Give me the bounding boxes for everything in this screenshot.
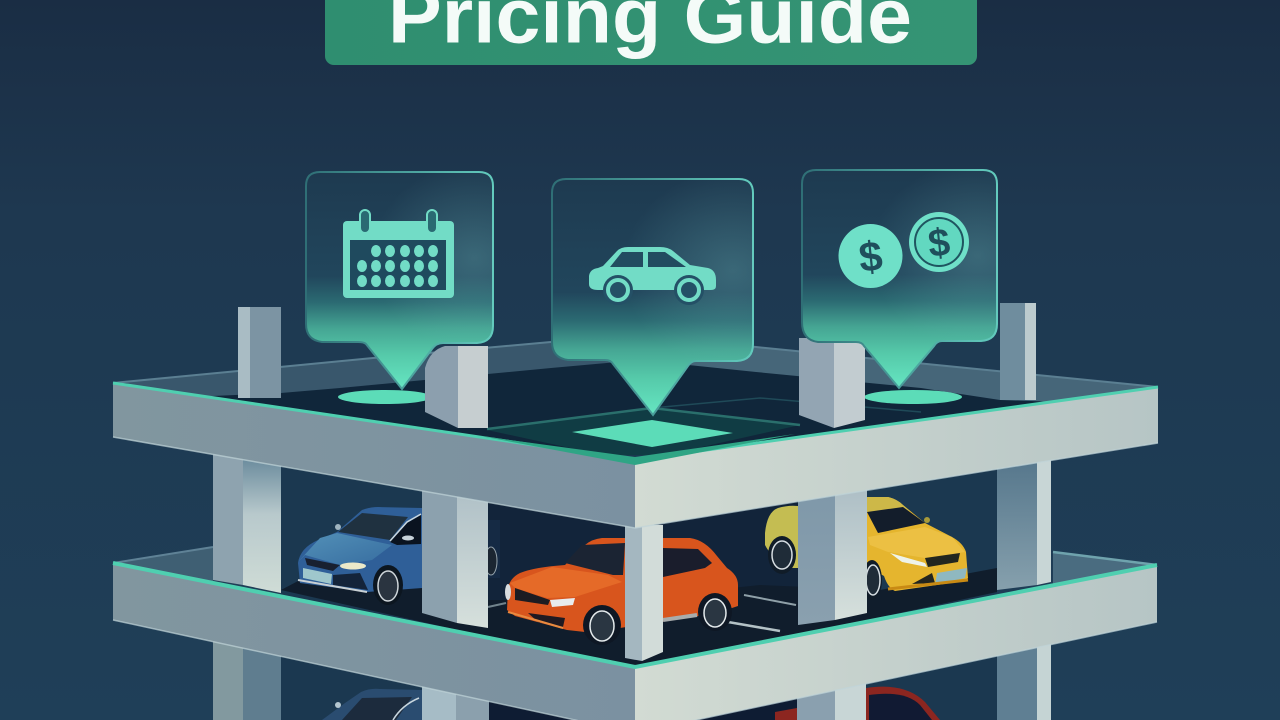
upper floor slab: [113, 383, 1158, 528]
level three car: red: [775, 687, 940, 720]
car: far blue rear: [485, 520, 500, 578]
level three interior: [281, 640, 997, 720]
roof column: front left: [425, 346, 488, 428]
icon: car: [589, 247, 716, 305]
roof column: back right: [1000, 303, 1036, 400]
glowing floor pad: centre: [572, 420, 733, 447]
car: blue: [298, 507, 422, 605]
icon: dollar coin ring: $: [926, 221, 952, 266]
level two interior: [281, 455, 997, 675]
pin: pricing: [802, 170, 997, 388]
level three car: blue: [322, 689, 422, 720]
icon: dollar coin solid: $: [856, 232, 885, 281]
level two columns: [213, 450, 1051, 661]
lower floor slab: [113, 563, 1157, 720]
icon: calendar: [343, 210, 454, 298]
pin: calendar: [306, 172, 493, 389]
level three columns: [213, 630, 1051, 720]
glowing floor pad: right: [864, 390, 962, 404]
icon: dollar coin ring: [909, 212, 969, 272]
glowing floor pad: left: [338, 390, 432, 404]
pin: vehicle type: [552, 179, 753, 415]
car: yellow: [765, 497, 968, 600]
roof parapet walls: [113, 335, 1158, 420]
level two parapet walls: [113, 547, 1157, 600]
icon: dollar coin solid: [838, 224, 902, 288]
roof deck: [190, 360, 1060, 465]
roof column: front right: [799, 338, 865, 428]
roof column: back left: [238, 307, 281, 398]
car: orange: [505, 538, 738, 645]
